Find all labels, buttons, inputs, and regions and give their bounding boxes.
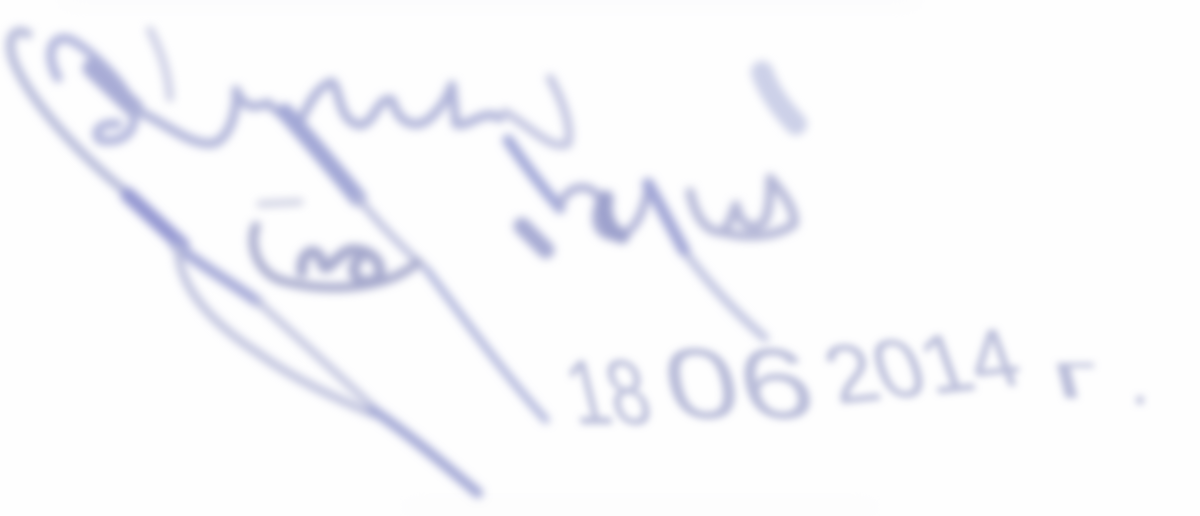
thick initial stroke (92, 68, 134, 108)
second word (560, 188, 648, 237)
upper right mark (762, 72, 796, 124)
long dark diagonal (285, 112, 358, 198)
loop tail (373, 410, 478, 493)
final period: . (1130, 340, 1150, 420)
small initial (522, 226, 546, 250)
outer signature loop (10, 32, 130, 195)
given name initial word (253, 226, 418, 287)
date year: 2014 (812, 312, 1034, 422)
year abbreviation: г (1041, 339, 1110, 413)
lower loop line (178, 250, 373, 414)
date month: 06 (653, 328, 825, 440)
inner initial loop (51, 38, 134, 141)
upper lower-loop line (175, 245, 258, 302)
dark accent on loop (128, 195, 182, 245)
date day: 18 (555, 340, 661, 444)
handwritten date (555, 312, 1150, 444)
surname tail v (505, 78, 569, 145)
signature strokes (10, 30, 796, 493)
tall initial stroke (150, 30, 170, 98)
surname scribble (134, 82, 500, 144)
second diagonal (508, 140, 560, 208)
